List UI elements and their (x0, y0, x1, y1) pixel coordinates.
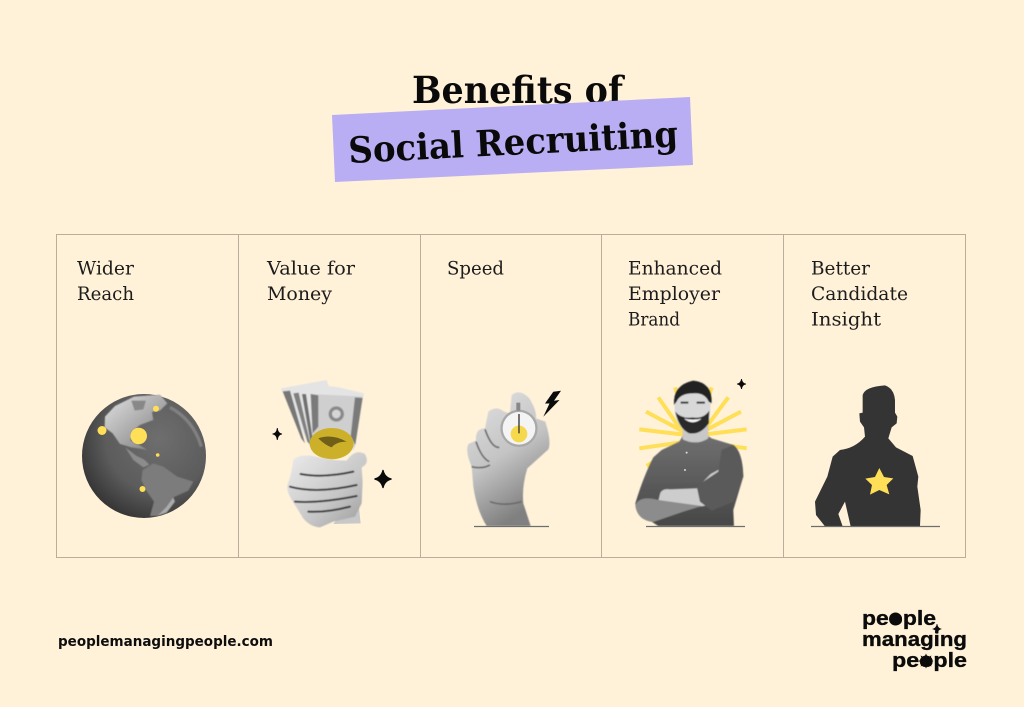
icon: lightning bolt (543, 391, 561, 417)
yellow location dots (98, 406, 160, 492)
heading: Wider Reach: Reach (77, 284, 134, 305)
heading: Enhanced Employer Brand: Brand (628, 310, 680, 330)
logo: people managing people: people (892, 649, 967, 672)
title line: Benefits of: Benefits of (412, 68, 625, 112)
heading: Enhanced Employer Brand: Employer (628, 284, 720, 305)
panel: wider reach (77, 258, 206, 518)
benefits table grid (56, 234, 966, 558)
heading: Better Candidate Insight: Better (811, 258, 870, 280)
heading: Value for Money (266, 258, 355, 305)
icon: globe with yellow dots (82, 394, 206, 518)
icon: person silhouette (815, 385, 921, 526)
heading: Wider Reach: Wider (77, 258, 134, 280)
panel: better candidate insight (811, 258, 940, 526)
heading: Value for Money: Value for (266, 258, 355, 280)
ground line (474, 526, 549, 528)
logo: people managing people (862, 607, 967, 672)
heading: Better Candidate Insight (811, 258, 908, 330)
stopwatch face (500, 410, 538, 447)
panel: value for money (266, 258, 392, 527)
panel: enhanced employer brand (628, 258, 747, 526)
footer website url: peoplemanagingpeople.com (58, 634, 273, 650)
title (332, 68, 693, 182)
icon: hand holding dollar notes (281, 380, 367, 527)
yellow coin overlay (310, 428, 354, 459)
icon: small sparkle (737, 379, 746, 389)
title line: Social Recruiting: Social Recruiting (347, 113, 679, 172)
icon: small sparkle (272, 428, 282, 440)
yellow star (865, 468, 893, 495)
panel: speed (447, 258, 561, 526)
purple highlight banner (332, 97, 693, 182)
heading: Enhanced Employer Brand: Enhanced (628, 258, 722, 280)
heading: Speed: Speed (447, 258, 504, 280)
heading: Better Candidate Insight: Candidate (811, 284, 908, 305)
heading: Better Candidate Insight: Insight (811, 310, 882, 330)
icon: yellow sun rays (639, 387, 747, 466)
heading: Enhanced Employer Brand (628, 258, 722, 330)
icon: smiling man with crossed arms (635, 381, 743, 526)
logo: people managing people: managing (862, 628, 967, 651)
logo: people managing people: people (862, 607, 936, 630)
heading: Wider Reach (77, 258, 134, 305)
icon: hand holding stopwatch (467, 392, 549, 526)
ground line (646, 526, 745, 528)
ground line (811, 526, 940, 528)
icon: large sparkle (374, 470, 392, 488)
heading: Value for Money: Money (267, 284, 333, 305)
